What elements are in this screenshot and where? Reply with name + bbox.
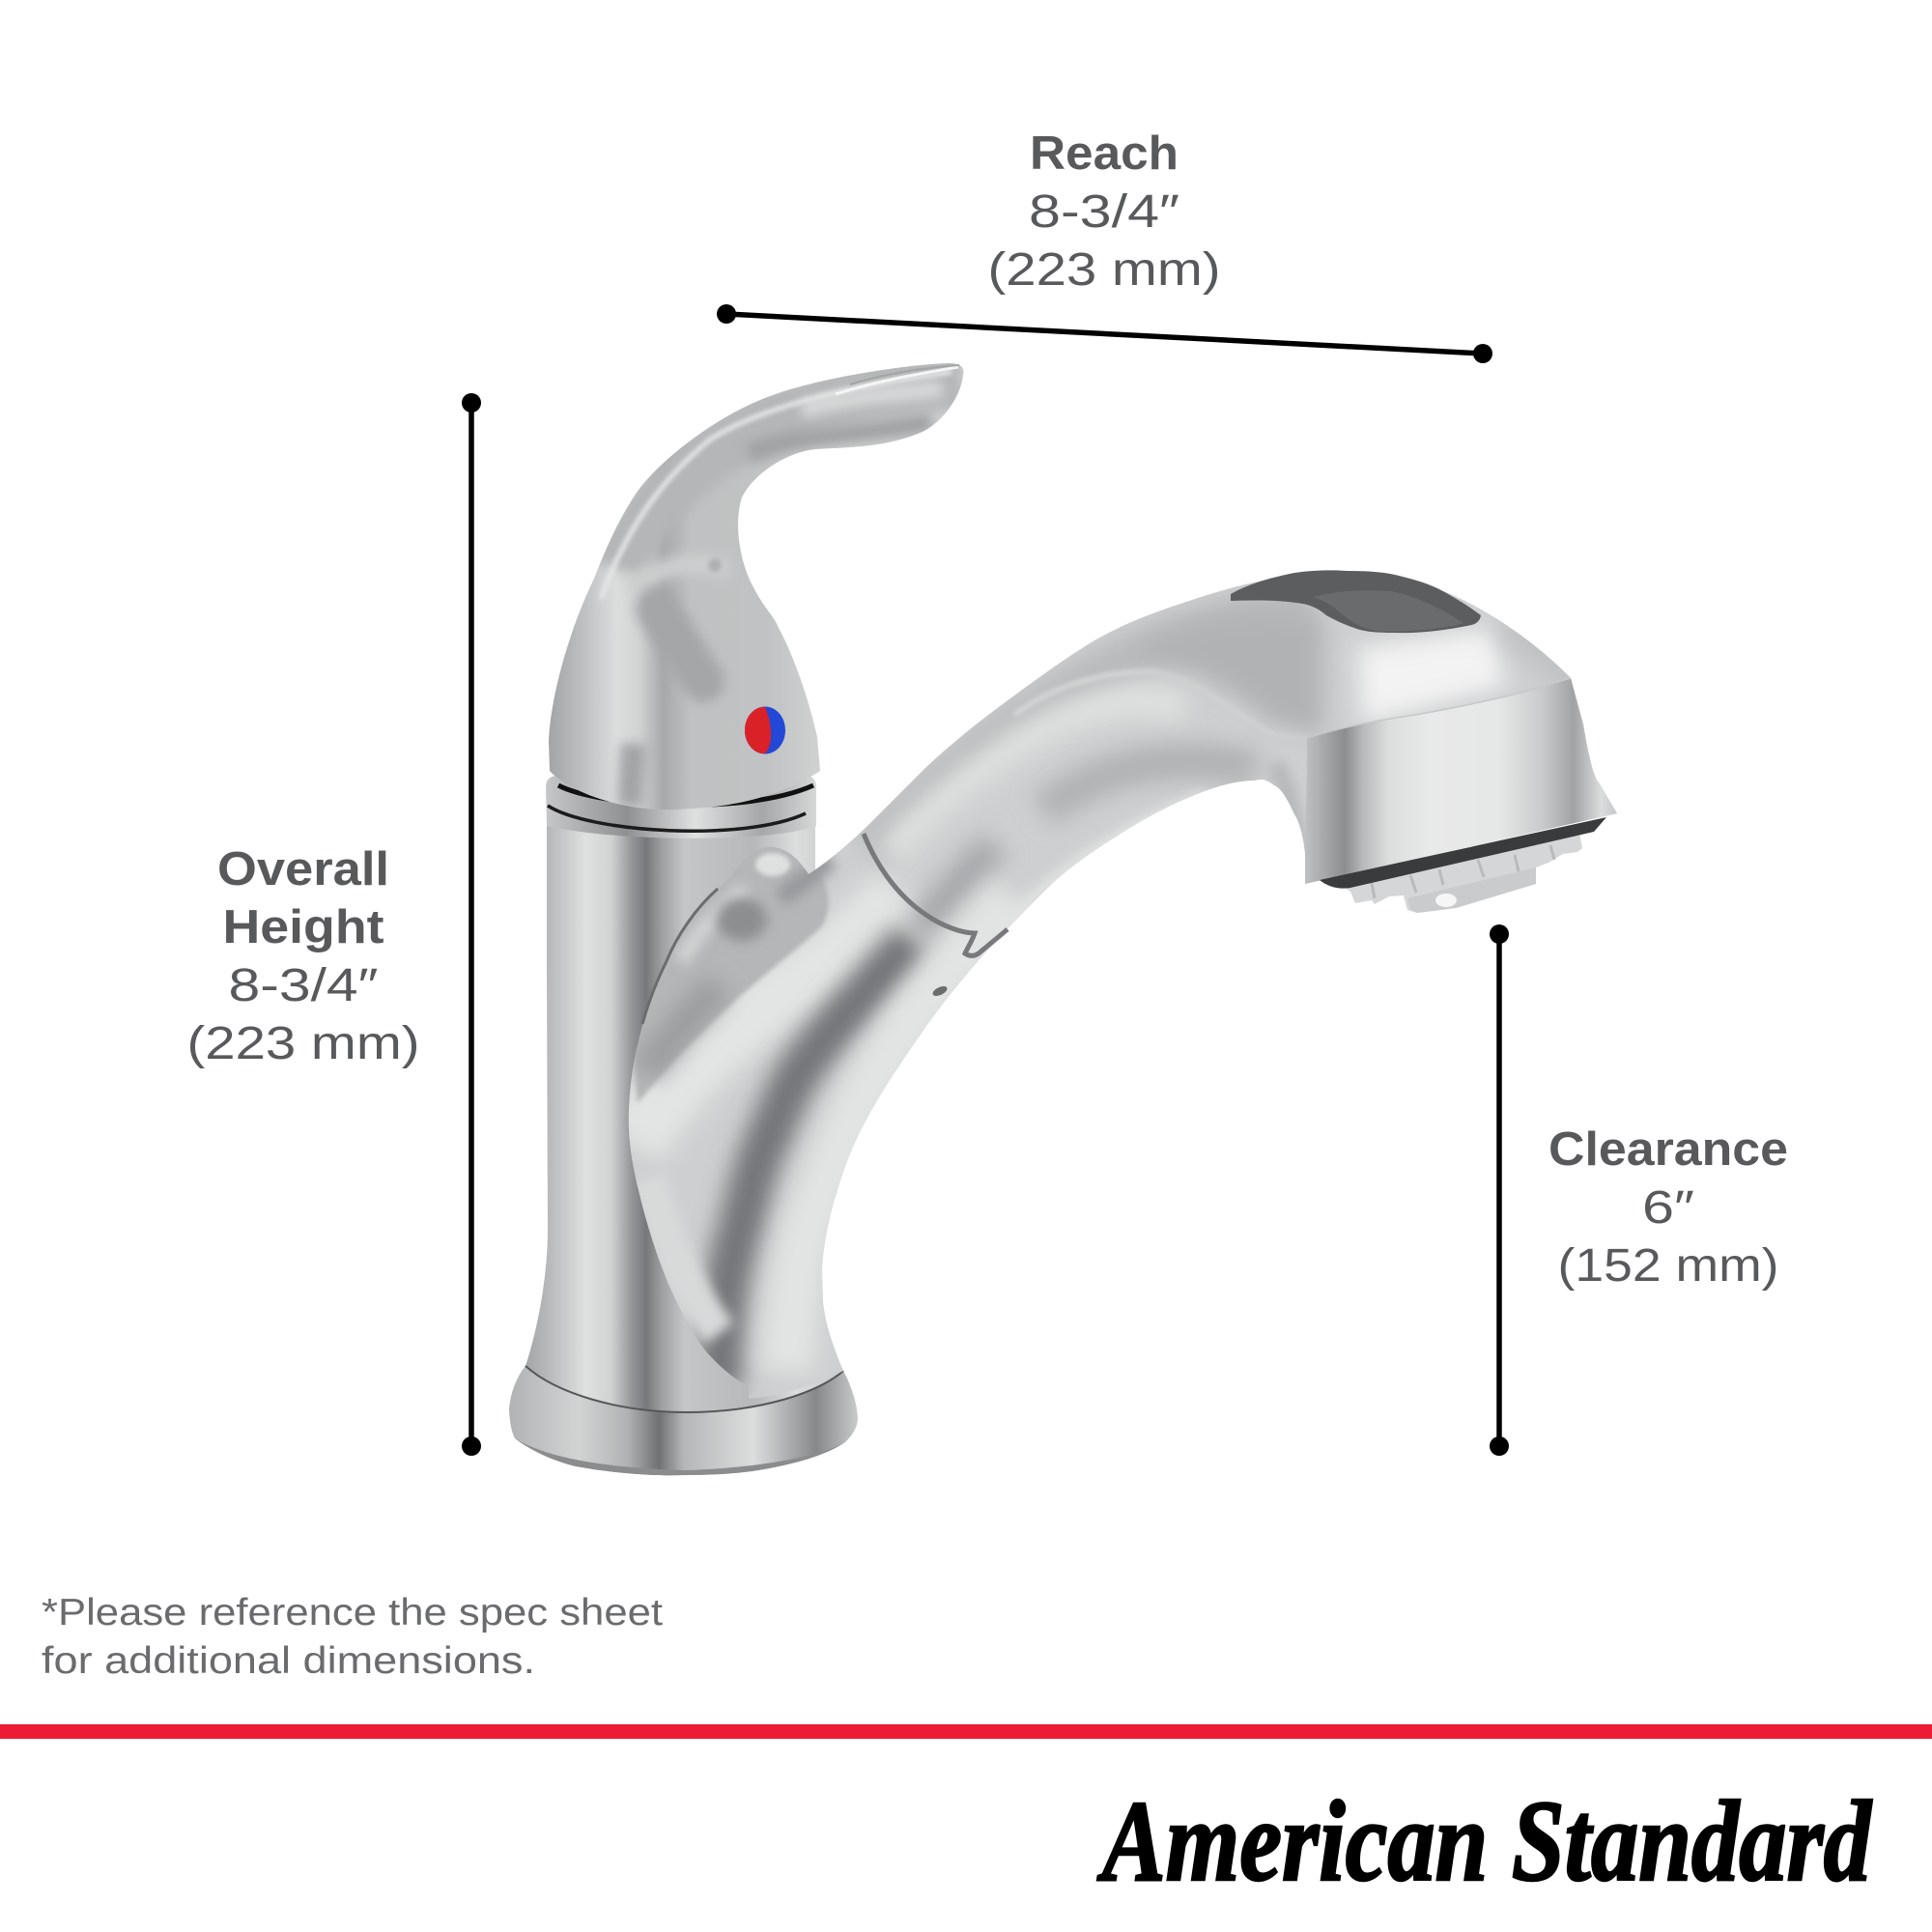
reach label: 8-3/4″ (1029, 186, 1179, 238)
spout and spray head body (618, 560, 1623, 1410)
tube top shade (869, 609, 1314, 850)
clearance label: Clearance (1548, 1123, 1788, 1176)
band beyond seam (918, 845, 995, 932)
lobe knob highlight (755, 853, 790, 876)
spray nozzle teeth (1338, 833, 1582, 913)
tube ridge (1014, 668, 1163, 716)
overall height label: 8-3/4″ (228, 960, 379, 1011)
overall height label: Height (222, 901, 384, 953)
clearance label: (152 mm) (1557, 1240, 1779, 1292)
button lighter inset (1314, 590, 1463, 632)
reach label (987, 128, 1221, 296)
collar ring (546, 776, 816, 838)
faucet base plate (509, 1366, 858, 1475)
clearance label: 6″ (1642, 1182, 1694, 1234)
spray nozzle ring (1305, 678, 1617, 884)
lobe right shadow (781, 860, 831, 898)
upper head grey (1140, 612, 1323, 734)
reach label: Reach (1030, 128, 1179, 180)
lobe left edge (642, 889, 718, 1024)
clearance label (1548, 1123, 1788, 1292)
neck shade (1275, 763, 1299, 869)
lobe dark blob (717, 898, 767, 941)
tube under ridge shade (1043, 761, 1256, 811)
dark spray button (1231, 570, 1481, 633)
red divider bar (0, 1724, 1932, 1739)
footnote (42, 1592, 663, 1682)
base plate front lip (515, 1438, 845, 1475)
lever handle (541, 357, 971, 816)
handle underside shadow (749, 422, 932, 454)
black gasket (1320, 817, 1606, 889)
lower lobe light (649, 1179, 720, 1333)
lobe bright band (633, 894, 903, 1145)
overall height label: Overall (217, 843, 389, 895)
footnote: for additional dimensions. (42, 1640, 535, 1682)
spout small hole (931, 984, 949, 998)
handle lever top (618, 382, 961, 570)
reach label: (223 mm) (987, 244, 1221, 296)
nozzle top edge line (1307, 678, 1571, 738)
collar groove lower (548, 806, 806, 831)
dark band (720, 939, 913, 1391)
overall height label (187, 843, 419, 1069)
handle left edge highlight (601, 372, 952, 599)
spout seam (864, 834, 1008, 955)
overall height dimension line (462, 393, 481, 1456)
handle lip glare (836, 367, 958, 394)
clearance dimension line (1490, 924, 1509, 1456)
tube lower edge light (1022, 790, 1204, 911)
lobe wedge shadow (633, 840, 829, 1103)
overall height label: (223 mm) (187, 1018, 419, 1069)
head right shade (1497, 622, 1571, 682)
head bright glare (1357, 628, 1507, 724)
collar groove upper (558, 785, 813, 805)
handle cup highlight (802, 388, 942, 411)
handle dark facet (657, 609, 703, 681)
handle lip edge (850, 365, 959, 384)
base seam line (526, 1366, 843, 1412)
wedge dark core (645, 985, 720, 1072)
faucet column (526, 821, 843, 1412)
handle neck light (628, 564, 729, 589)
handle small dimple (708, 558, 722, 572)
tube upper light band (889, 701, 1183, 855)
footnote: *Please reference the spec sheet (42, 1592, 663, 1634)
faucet illustration (509, 357, 1623, 1475)
handle lower dark band (630, 744, 634, 807)
lobe wedge light top (681, 889, 746, 961)
band right bright (787, 898, 1014, 1372)
reach dimension line (717, 304, 1492, 363)
hot and cold indicator (745, 707, 785, 753)
